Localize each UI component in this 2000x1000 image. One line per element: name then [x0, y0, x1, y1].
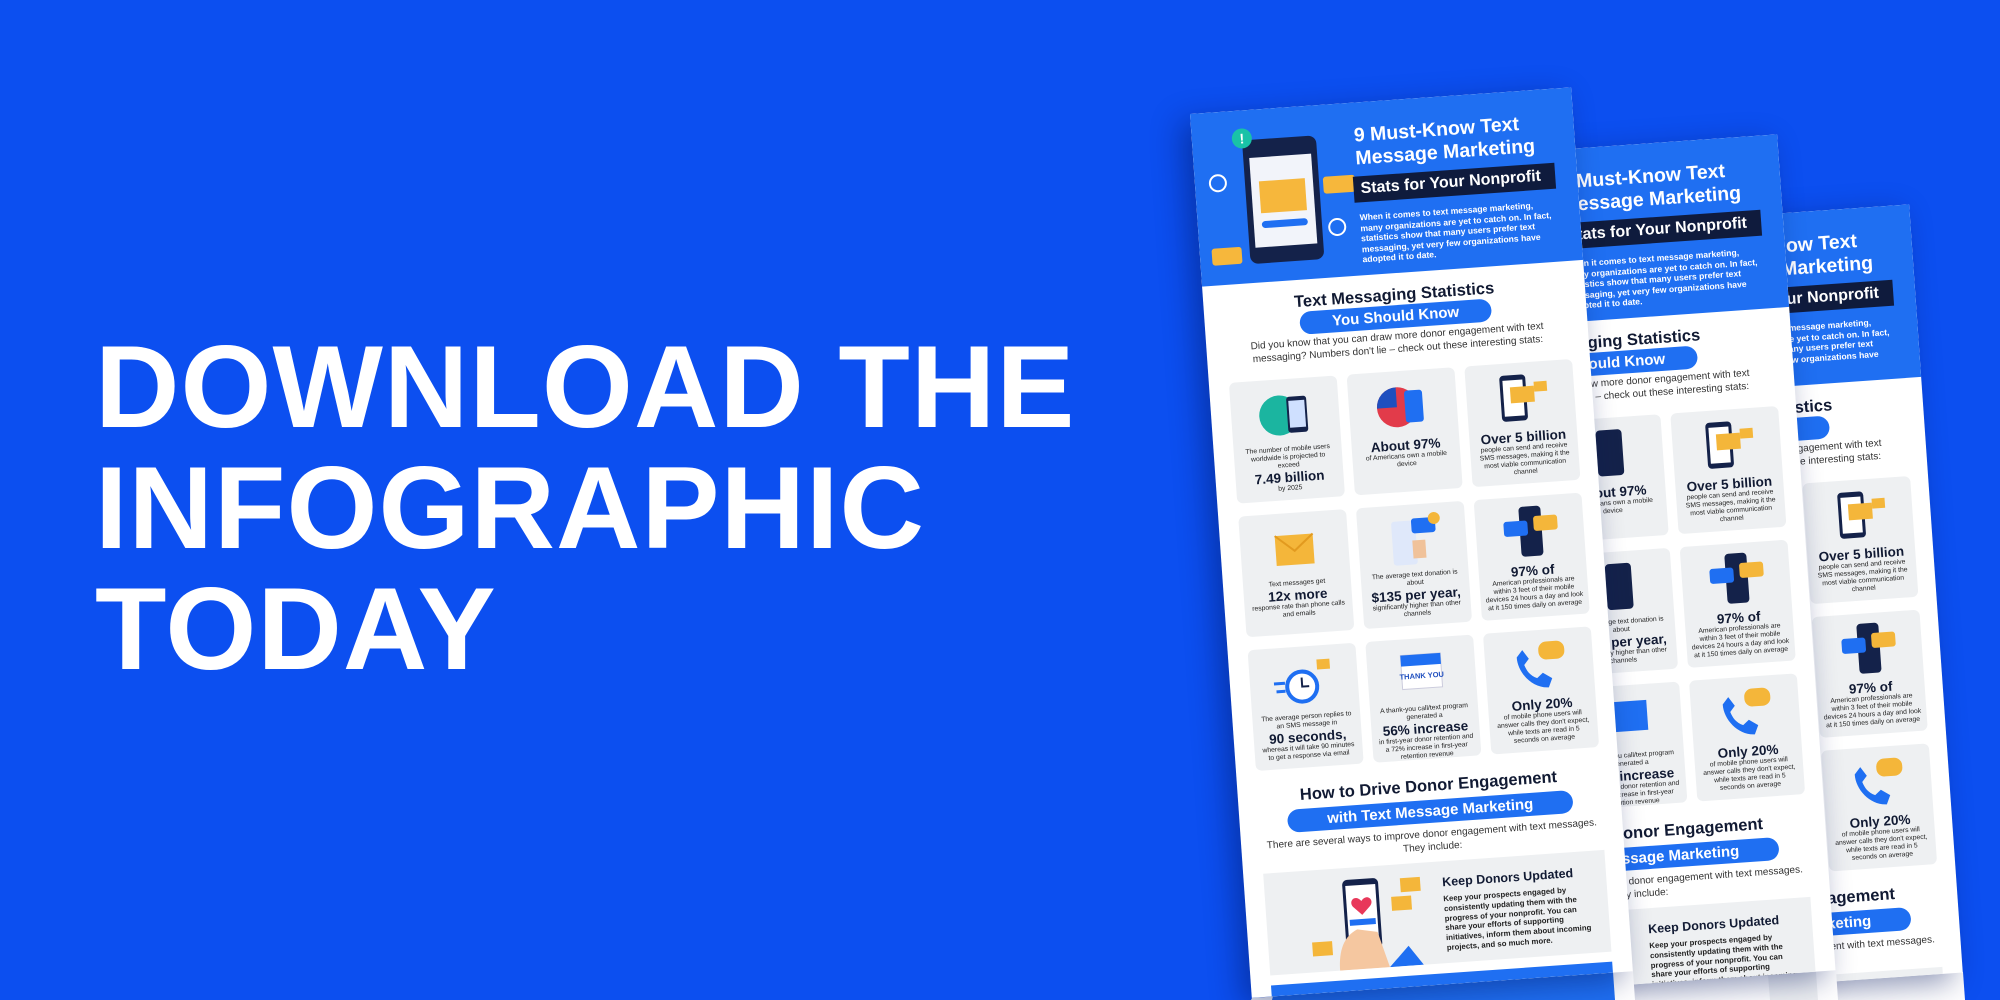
header paragraph: When it comes to text message marketing, many organizations are yet to catch on. In fact, statistics show that many users prefer text messaging, yet very few organizations have adopted it to date.	[1359, 200, 1552, 265]
stat card: over 5 billion	[1464, 359, 1580, 487]
page 2 cards: people can send and receive SMS messages, making it the most viable communication channel	[1686, 488, 1776, 523]
page 3 cards: people can send and receive SMS messages, making it the most viable communication channel	[1818, 558, 1908, 593]
page 2 heading: Text Messaging Statistics	[1499, 326, 1701, 358]
stat card: 97% of professionals: 97% of	[1510, 562, 1555, 580]
title: 9 Must-Know Text Message Marketing	[1353, 113, 1536, 170]
subtitle box: Stats for Your Nonprofit	[1360, 168, 1542, 197]
page 2 intro: Did you know that you can draw more donor engagement with text messaging? Numbers don't lie – check out these interesting stats:	[1456, 368, 1750, 412]
page 1 (front)	[1190, 87, 1633, 998]
stat card: 12x more: Text messages get response rate than phone calls and emails	[1252, 578, 1345, 619]
page 3 pill 2: with Text Message Marketing	[1665, 913, 1872, 944]
page 2 header: 9 Must-Know Text Message Marketing	[1559, 160, 1742, 217]
page 2 cards: American professionals are within 3 feet of their mobile devices 24 hours a day and look at it 150 times daily on average	[1692, 622, 1789, 659]
icon: alert bubbles	[1208, 128, 1355, 266]
stat card: $135 per year: $135 per year,	[1371, 584, 1461, 605]
stat card: $135 per year	[1356, 501, 1472, 629]
stat card: only 20%	[1483, 626, 1599, 755]
page 2 how-to heading: How to Drive Donor Engagement	[1505, 815, 1764, 851]
stat card: about 97%: About 97%	[1370, 435, 1441, 455]
page 2 cards: 97% of	[1716, 609, 1761, 627]
page 2 (middle)	[1396, 134, 1836, 997]
page 2 cards: About 97%	[1576, 482, 1647, 502]
section heading: how to drive: How to Drive Donor Engagement	[1299, 768, 1558, 804]
stat card: 12x more: 12x more	[1268, 586, 1328, 605]
page 3 heading: Text Messaging Statistics	[1631, 396, 1833, 428]
stat card: 56% increase: 56% increase	[1382, 718, 1469, 739]
page 3 cards: Only 20%	[1849, 812, 1911, 831]
page 2 pill 2	[1493, 837, 1780, 880]
stats grid	[1230, 360, 1598, 770]
page 3 pill: You Should Know	[1670, 421, 1798, 447]
stat card: 56% increase	[1365, 635, 1481, 763]
page 3 intro: Did you know that you can draw more donor engagement with text messaging? Numbers don't lie – check out these interesting stats:	[1588, 438, 1882, 482]
pill: you should know: You Should Know	[1332, 304, 1460, 330]
stat card: $135 per year: The average text donation is about significantly higher than other channels	[1372, 568, 1461, 618]
page 2 cards: of mobile phone users will answer calls they don't expect, while texts are read in 5 seconds on average	[1703, 756, 1796, 792]
page 2 header: When it comes to text message marketing, many organizations are yet to catch on. In fact, statistics show that many users prefer text messaging, yet very few organizations have adopted it to date.	[1565, 247, 1758, 312]
page 2 pill: You Should Know	[1538, 351, 1666, 377]
page 2 header: Stats for Your Nonprofit	[1566, 215, 1748, 244]
page 2 feature card: Keep Donors Updated	[1648, 913, 1780, 936]
stat card: 97% of professionals	[1474, 493, 1590, 621]
section heading: statistics: Text Messaging Statistics	[1293, 279, 1495, 311]
page 3 header: Stats for Your Nonprofit	[1698, 285, 1880, 314]
heading: download the infographic today: TODAY	[95, 563, 497, 694]
header band	[1190, 87, 1583, 287]
stat card: 7.49 billion	[1229, 375, 1345, 504]
page 3 how-to heading: How to Drive Donor Engagement	[1637, 885, 1896, 921]
stat card: about 97%	[1347, 367, 1463, 495]
page 3 cards: Over 5 billion	[1818, 544, 1905, 564]
page 3 header: 9 Must-Know Text Message Marketing	[1691, 230, 1874, 287]
page 3 header: When it comes to text message marketing, many organizations are yet to catch on. In fact, statistics show that many users prefer text messaging, yet very few organizations have adopted it to date.	[1697, 317, 1890, 382]
stat card: 56% increase: THANK YOU	[1399, 670, 1444, 682]
page 2 cards: Over 5 billion	[1686, 474, 1773, 494]
page 2 pill 2: with Text Message Marketing	[1533, 843, 1740, 874]
page 3 header	[1528, 204, 1921, 404]
page 3 cards	[1802, 476, 1936, 871]
page 3 para 2: There are several ways to improve donor engagement with text messages. They include:	[1605, 934, 1935, 971]
page 2 cards: of Americans own a mobile device	[1572, 497, 1653, 515]
page 2 feature card	[1469, 897, 1816, 996]
page 2 cards: Only 20%	[1717, 742, 1779, 761]
page 2 para 2: There are several ways to improve donor engagement with text messages. They include:	[1473, 864, 1803, 901]
heading: download the infographic today: DOWNLOAD THE	[95, 321, 1075, 452]
stat card: 56% increase: A thank-you call/text program generated a in first-year donor retention and a 72% increase in first-year retention revenue	[1379, 702, 1474, 761]
icon: hand with phone	[1312, 876, 1424, 970]
icon: phone with envelope	[1242, 135, 1324, 264]
page 3 pill	[1637, 415, 1830, 452]
pill: you should know	[1299, 298, 1492, 335]
page 3 cards: 97% of	[1848, 679, 1893, 697]
pill: with text message marketing: with Text Message Marketing	[1327, 796, 1534, 827]
stat card: 90 seconds: 90 seconds,	[1269, 727, 1347, 747]
stat card: 90 seconds: The average person replies to an SMS message in whereas it will take 90 minutes to get a response via email	[1261, 710, 1355, 762]
subtitle box	[1353, 163, 1556, 203]
stat card: 12x more	[1238, 509, 1354, 637]
feature text: Keep your prospects engaged by consistently updating them with the progress of your nonprofit. You can share your efforts of supporting initiatives, inform them about incoming projects, and so much more.	[1443, 886, 1592, 952]
stat card: 90 seconds	[1248, 643, 1364, 771]
heading: download the infographic today	[95, 321, 1075, 694]
page 2 cards: $135 per year,	[1577, 631, 1667, 652]
pill: with text message marketing	[1287, 790, 1574, 833]
stat card: 7.49 billion: 7.49 billion	[1254, 468, 1325, 487]
next feature band	[1271, 962, 1613, 996]
page 3 cards: of mobile phone users will answer calls they don't expect, while texts are read in 5 seconds on average	[1835, 826, 1928, 862]
page 2 header	[1396, 134, 1789, 334]
icon: alert bubbles: !	[1239, 130, 1245, 147]
page 2 cards: The average text donation is about significantly higher than other channels	[1578, 615, 1667, 665]
feature card: keep donors updated	[1263, 850, 1611, 975]
stat card: about 97%: of Americans own a mobile device	[1366, 450, 1447, 468]
page 3 pill 2	[1625, 907, 1912, 950]
page 2 cards: 56% increase	[1588, 765, 1675, 786]
page 2 cards	[1572, 406, 1804, 808]
stat card: only 20%: Only 20%	[1511, 695, 1573, 714]
stat card: only 20%: of mobile phone users will answer calls they don't expect, while texts are read in 5 seconds on average	[1497, 709, 1590, 745]
intro paragraph: Did you know that you can draw more donor engagement with text messaging? Numbers don't lie – check out these interesting stats:	[1250, 321, 1544, 365]
page 2 cards: A thank-you call/text program generated a in first-year donor retention and a 72% increase in first-year retention revenue	[1585, 749, 1680, 808]
feature title: Keep Donors Updated	[1442, 866, 1574, 889]
page 2 pill	[1505, 345, 1698, 382]
heading: download the infographic today: INFOGRAPHIC	[95, 442, 925, 573]
stat card: 97% of professionals: American professionals are within 3 feet of their mobile devices 24 hours a day and look at it 150 times daily on average	[1486, 575, 1583, 612]
page 3 cards: American professionals are within 3 feet of their mobile devices 24 hours a day and look at it 150 times daily on average	[1824, 692, 1921, 729]
page 3 feature card	[1601, 967, 1943, 998]
page 3 (back)	[1528, 204, 1963, 999]
stat card: over 5 billion: people can send and receive SMS messages, making it the most viable communication channel	[1480, 441, 1570, 476]
paragraph: several ways: There are several ways to improve donor engagement with text messages. They include:	[1267, 817, 1597, 854]
stat card: 7.49 billion: The number of mobile users worldwide is projected to exceed by 2025	[1245, 443, 1330, 493]
stat card: over 5 billion: Over 5 billion	[1480, 427, 1567, 447]
